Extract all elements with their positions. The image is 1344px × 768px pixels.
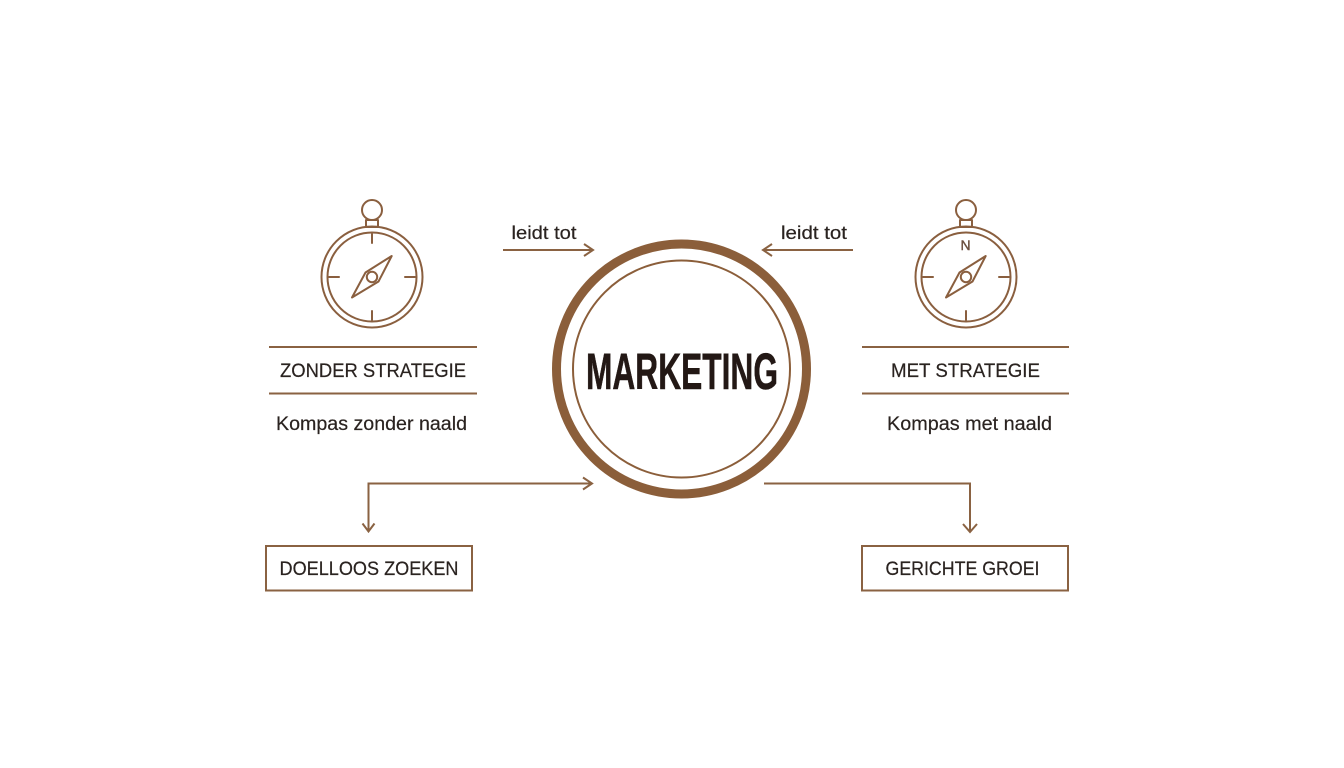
- central circle: marketing: [556, 244, 806, 494]
- panel: met strategie: [862, 200, 1069, 435]
- arrow: marketing to gerichte groei: [764, 484, 977, 532]
- box: gerichte groei: [862, 546, 1068, 590]
- icon: compass without needle label: [322, 200, 422, 328]
- icon: compass with needle and N: [916, 200, 1016, 328]
- label: leidt tot right: leidt tot: [781, 223, 847, 243]
- text: kompas zonder naald: Kompas zonder naald: [276, 414, 467, 435]
- heading: met strategie: [862, 347, 1069, 394]
- text: kompas met naald: Kompas met naald: [887, 414, 1052, 435]
- heading: zonder strategie: [269, 347, 477, 394]
- label: leidt tot left: leidt tot: [512, 223, 576, 243]
- heading: zonder strategie: ZONDER STRATEGIE: [280, 361, 466, 382]
- panel: zonder strategie: [269, 200, 477, 435]
- arrow: doelloos zoeken to marketing: [362, 478, 592, 532]
- title: marketing: MARKETING: [586, 343, 778, 400]
- box: gerichte groei: GERICHTE GROEI: [886, 559, 1040, 580]
- icon: compass with needle and N: N: [960, 237, 971, 253]
- box: doelloos zoeken: DOELLOOS ZOEKEN: [280, 559, 458, 580]
- box: doelloos zoeken: [266, 546, 472, 590]
- heading: met strategie: MET STRATEGIE: [891, 361, 1040, 382]
- arrow: left to marketing: [503, 244, 593, 256]
- arrow: right to marketing: [763, 244, 853, 256]
